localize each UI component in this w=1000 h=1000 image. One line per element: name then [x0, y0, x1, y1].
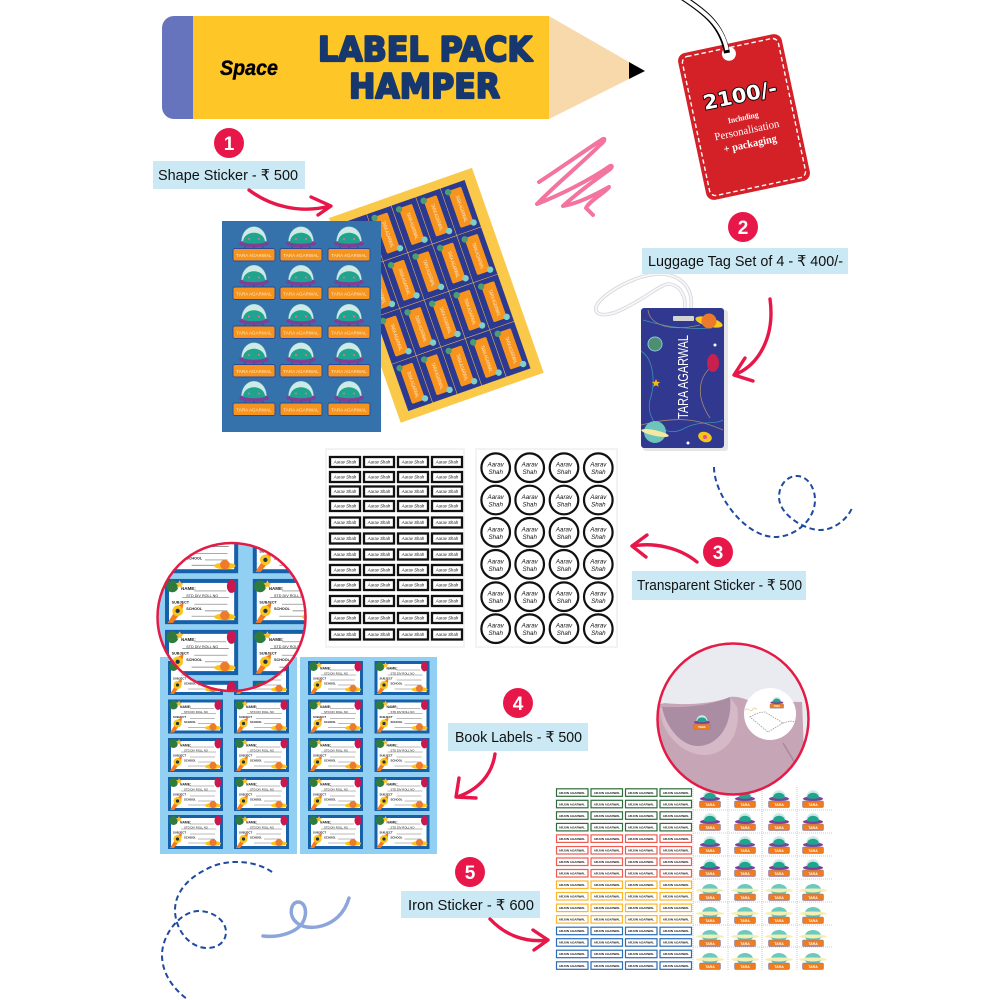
orbit lines [641, 310, 723, 432]
price: 2100/- [701, 76, 779, 115]
price tag [677, 0, 811, 201]
pencil wood tip [549, 16, 629, 119]
dashed swirl doodle left [162, 862, 272, 999]
step 1 badge: 1 [224, 134, 235, 155]
step 3 badge: 3 [713, 543, 723, 564]
price note: + packaging [723, 133, 778, 156]
label: transparent sticker [632, 571, 806, 600]
neck sticker [694, 715, 710, 729]
iron detail circle [744, 688, 796, 740]
price note: Personalisation [713, 118, 781, 143]
title: LABEL PACK [318, 30, 534, 70]
label: transparent sticker: Transparent Sticker - ₹ 500 [637, 577, 802, 594]
yellow tag sticker sheet [329, 168, 544, 423]
step 1 badge [214, 128, 244, 158]
transparent rectangle sticker sheet [326, 449, 464, 647]
rocket icon [697, 430, 713, 444]
label: book labels [448, 723, 588, 751]
step 3 badge [703, 537, 733, 567]
pencil lead point [629, 62, 645, 79]
step 4 badge: 4 [513, 694, 524, 715]
sleeve seam [783, 743, 795, 763]
blue shape sticker sheet [222, 221, 381, 432]
arrow 3 [632, 535, 697, 562]
step 5 badge: 5 [465, 863, 476, 884]
step 2 badge [728, 212, 758, 242]
label: iron sticker [401, 891, 540, 918]
collar inner [662, 697, 730, 746]
t-shirt [658, 696, 804, 794]
arrow 4 [456, 754, 495, 798]
t-shirt magnifier [650, 644, 808, 800]
alien icon [707, 354, 719, 372]
collar band [660, 697, 738, 755]
label: luggage tag: Luggage Tag Set of 4 - ₹ 400/- [648, 253, 843, 270]
luggage tag [641, 308, 728, 451]
iron sticker sheet [553, 786, 834, 974]
ringed planet icon [641, 421, 669, 443]
label: iron sticker: Iron Sticker - ₹ 600 [408, 897, 534, 914]
planet icon [694, 314, 724, 330]
label: book labels: Book Labels - ₹ 500 [455, 729, 582, 746]
arrow 5 [490, 919, 548, 950]
book label sheets [160, 657, 437, 854]
dashed loop doodle right [714, 467, 852, 537]
tag string [682, 0, 727, 53]
step 5 badge [455, 857, 485, 887]
arrow 2 [734, 299, 771, 381]
tag body [677, 33, 811, 201]
star icon [652, 379, 660, 387]
tag card [641, 308, 724, 448]
label: luggage tag [642, 248, 848, 274]
light blue squiggle [263, 898, 349, 936]
earth icon [648, 337, 662, 351]
dots [688, 345, 715, 443]
title: HAMPER [349, 67, 500, 107]
luggage tag strap [596, 274, 691, 318]
book label magnifier [156, 542, 307, 692]
step 4 badge [503, 688, 533, 718]
grid dots [693, 787, 832, 971]
label: shape sticker: Shape Sticker - ₹ 500 [158, 167, 298, 184]
tag shadow [643, 310, 728, 451]
pencil eraser end [162, 16, 193, 119]
price note [711, 106, 784, 157]
transparent round sticker sheet [476, 449, 617, 647]
pencil banner [162, 16, 645, 119]
label: shape sticker [153, 161, 305, 189]
theme name: Space [220, 57, 278, 80]
scribble [537, 139, 612, 215]
strap slot [673, 316, 694, 321]
title [318, 30, 534, 107]
name on tag: TARA AGARWAL [675, 335, 692, 419]
step 2 badge: 2 [738, 218, 748, 239]
pencil body [180, 16, 549, 119]
arrow 1 [249, 190, 331, 215]
price note: Including [727, 110, 759, 125]
